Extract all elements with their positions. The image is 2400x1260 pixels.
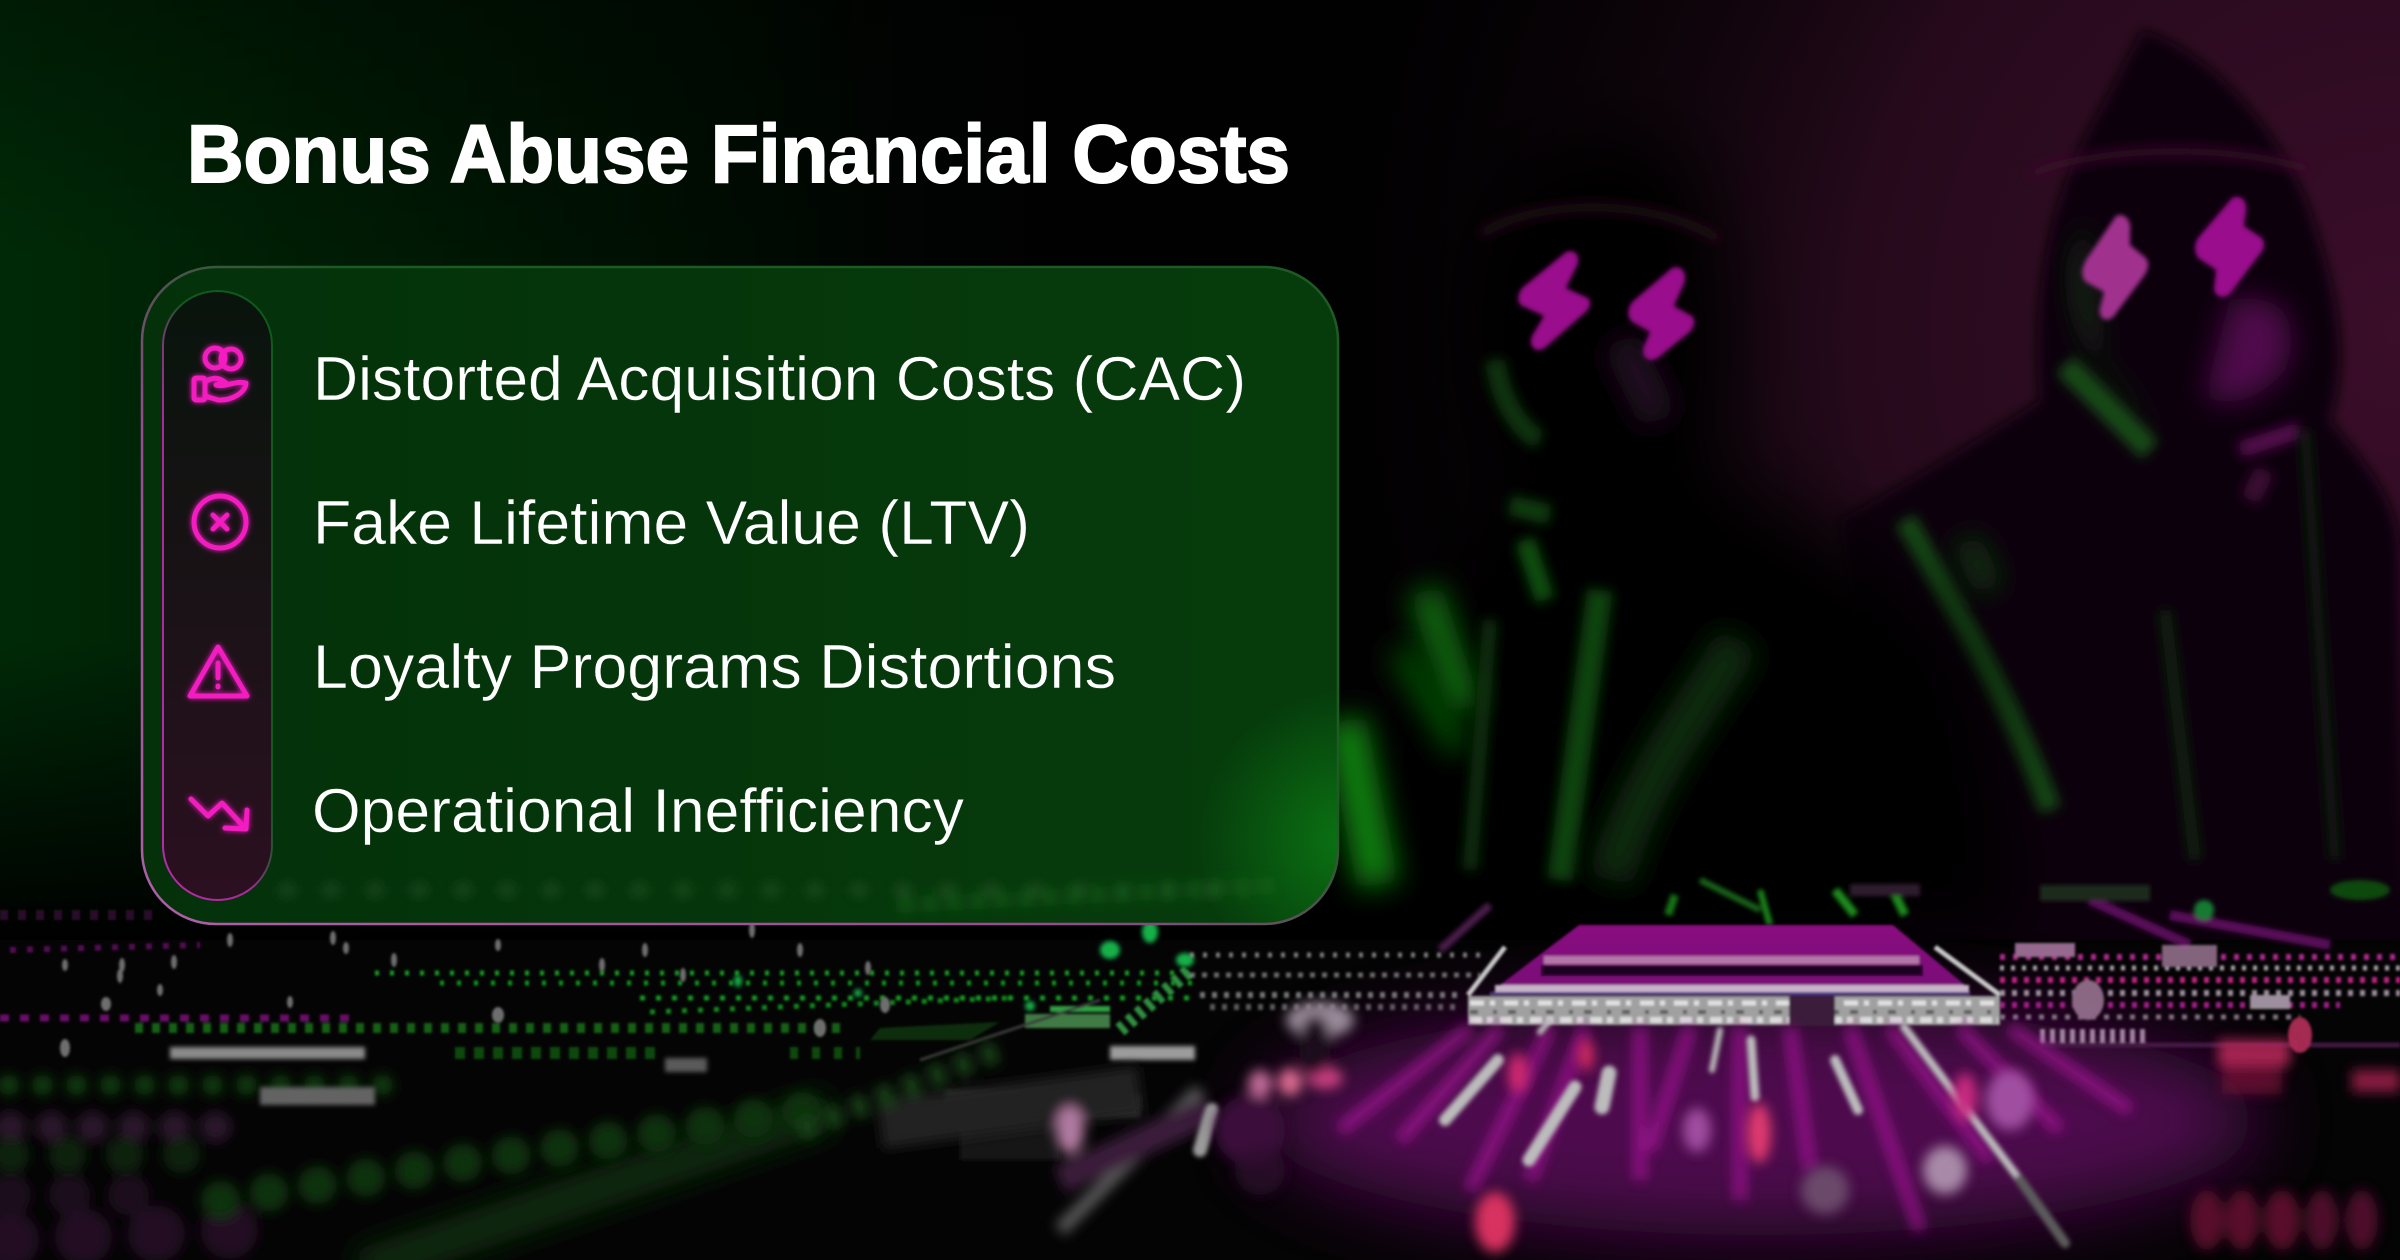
item: loyalty programs distortions: Loyalty Programs Distortions [313, 633, 1116, 702]
glowing green nodes [734, 921, 1194, 1011]
background: hooded figures [1345, 30, 2400, 940]
item: fake lifetime value: Fake Lifetime Value (LTV) [313, 489, 1030, 558]
figure: left hooded person [1345, 132, 2020, 940]
item: operational inefficiency: Operational Inefficiency [312, 777, 964, 846]
purple glow behind traces [1260, 1005, 2260, 1235]
dotted rows: right of chip [2000, 943, 2400, 1053]
background: circuit board, right side with chip [1190, 880, 2400, 1252]
radiating magenta traces [1340, 1028, 2130, 1230]
green chip component [870, 970, 1190, 1060]
grey specks [60, 922, 890, 1057]
dotted rows: green and purple [0, 915, 1200, 1053]
icon rail [163, 291, 272, 900]
figure: right hooded person [1840, 30, 2400, 940]
title: Bonus Abuse Financial Costs [187, 109, 1290, 200]
icon: trending down arrow [191, 799, 247, 829]
grey and pink blurred traces [800, 1050, 1210, 1230]
dotted rows: left of chip [1190, 955, 1480, 1007]
panel: cost list card [142, 267, 1338, 924]
radiating white traces [1200, 1020, 2065, 1243]
icon: warning triangle [190, 647, 247, 696]
background: circuit board, left side [0, 915, 1210, 1260]
list: cost items [312, 345, 1246, 846]
chip [1468, 925, 2000, 1026]
icon: glowing lightning eyes [1518, 197, 2264, 360]
blurred white component bars [170, 1046, 1195, 1160]
item: distorted acquisition costs: Distorted Acquisition Costs (CAC) [313, 345, 1246, 414]
panel background [142, 267, 1338, 924]
pink and white bokeh [1215, 1002, 2400, 1252]
dark strip above chip with green traces [1440, 880, 2390, 950]
icon: hand holding coins [194, 348, 246, 400]
chip base: noisy white solder band [1468, 995, 2000, 1026]
glow: green diagonal trace [360, 1110, 830, 1260]
icon: circled cross [194, 496, 246, 548]
blurred bokeh rows [8, 1085, 840, 1240]
